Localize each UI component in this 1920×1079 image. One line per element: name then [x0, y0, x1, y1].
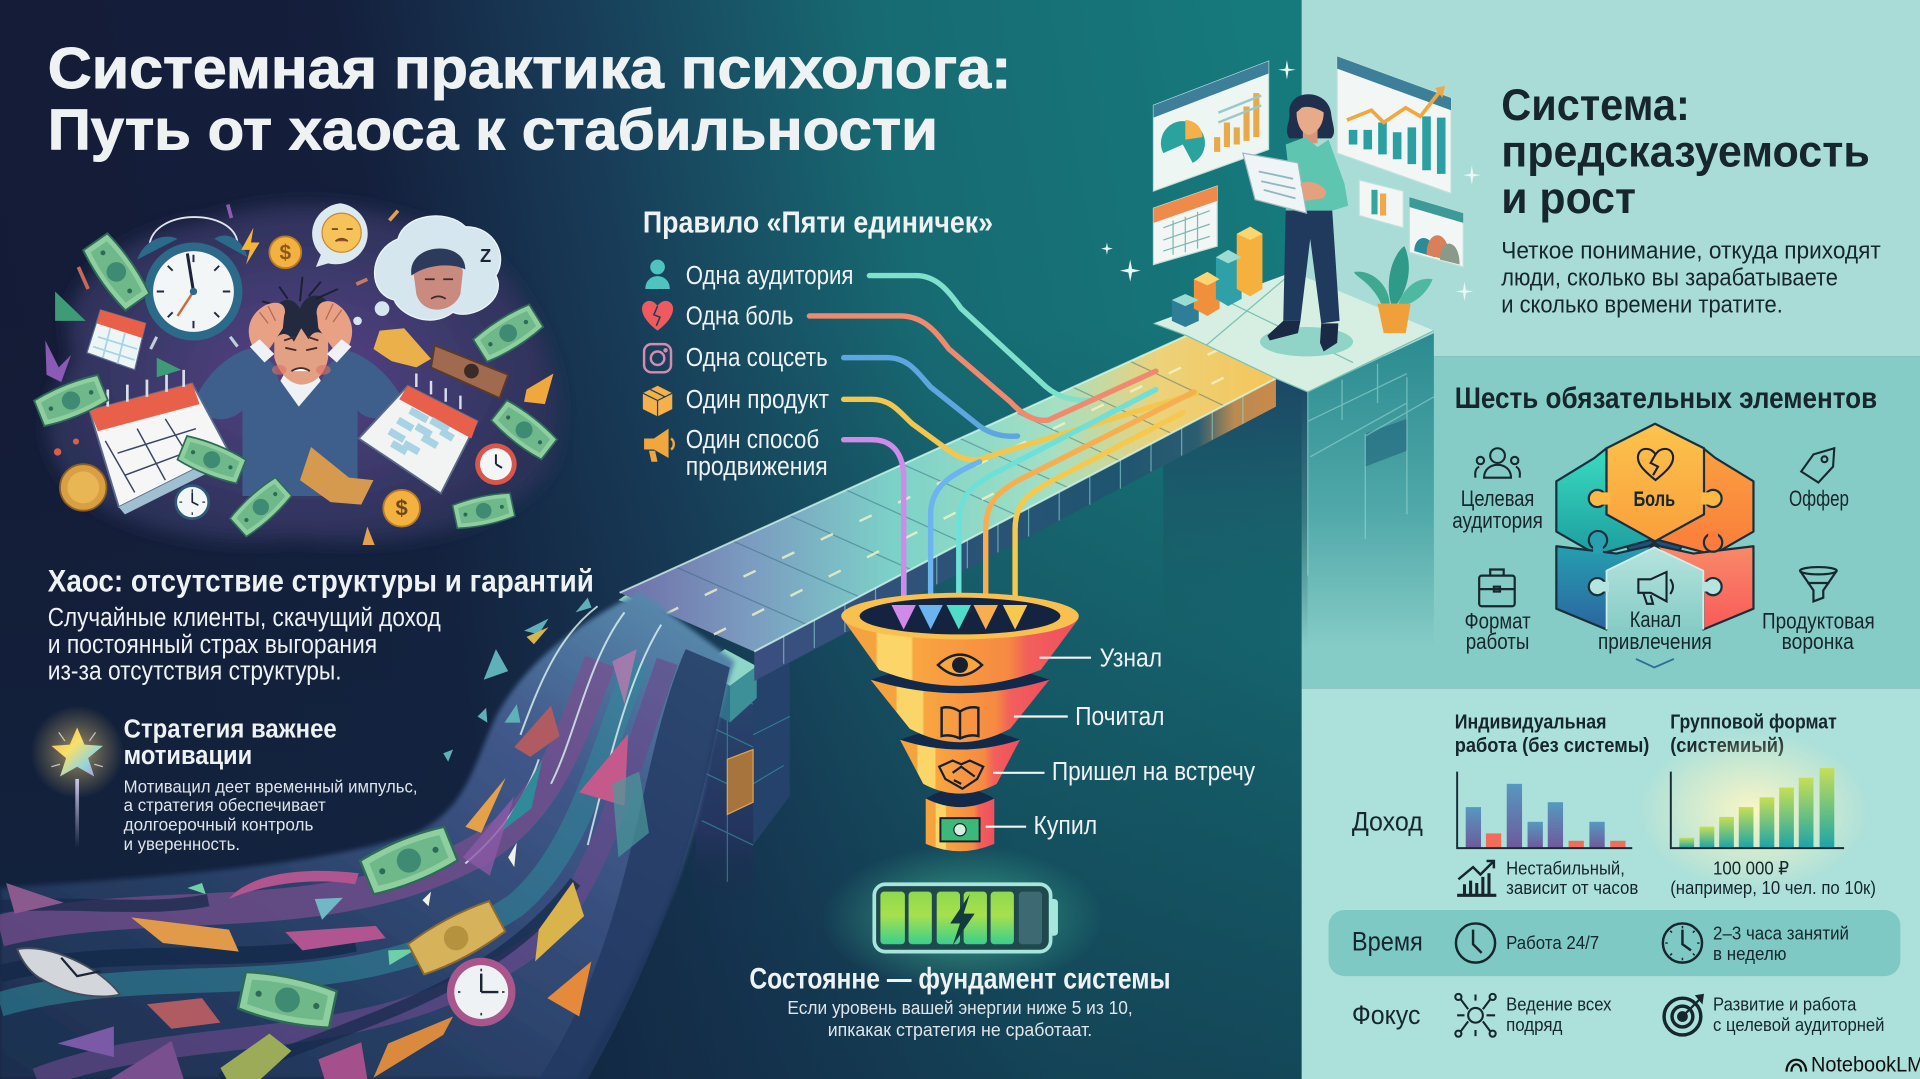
six element labels: [1452, 486, 1875, 654]
column headers: работа (без системы): [1455, 735, 1649, 757]
chaos illustration: [33, 203, 559, 545]
icon: chart with arrow: [1457, 861, 1496, 895]
funnel bands: [871, 680, 1049, 742]
system heading and text: [1501, 81, 1881, 318]
system heading and text: Четкое понимание, откуда приходят: [1501, 237, 1881, 264]
blob behind chaos scene: [48, 204, 559, 542]
stream: audience line: [869, 276, 1089, 400]
arrows: five streams into funnel: [809, 276, 1196, 612]
right dashboard: [1337, 56, 1451, 194]
funnel labels: Купил: [1033, 812, 1097, 840]
rule labels: [686, 262, 853, 481]
chaos heading and description: и постоянный страх выгорания: [48, 631, 377, 659]
rule labels: Одна аудитория: [686, 262, 853, 290]
six element labels: Канал: [1630, 607, 1681, 632]
icon: instagram: [644, 344, 671, 372]
rule labels: продвижения: [686, 453, 828, 481]
comparison cell texts: 2–3 часа занятий: [1713, 922, 1849, 943]
icon: clock detailed: [1663, 923, 1702, 963]
strategy text block: и уверенность.: [124, 834, 240, 854]
sparkles: [1101, 60, 1481, 301]
six element labels: Целевая: [1461, 486, 1534, 511]
chaos heading and description: Хаос: отсутствие структуры и гарантий: [48, 563, 594, 599]
strategy text block: [124, 715, 418, 854]
chaos heading and description: [48, 563, 594, 686]
isometric bars: [1172, 227, 1262, 327]
funnel labels: Пришел на встречу: [1052, 758, 1255, 786]
rule labels: Один способ: [686, 426, 819, 454]
comparison cell texts: Развитие и работа: [1713, 993, 1857, 1014]
platform top: [1153, 272, 1434, 392]
strategy text block: мотивации: [124, 742, 252, 770]
right column panels: [1302, 0, 1920, 1079]
icon: magic wand star: [31, 705, 124, 848]
thought cloud: Z: [480, 245, 491, 266]
system heading and text: и сколько времени тратите.: [1501, 291, 1783, 318]
icon: broken heart pain: [1638, 449, 1673, 480]
funnel labels: [1033, 644, 1255, 840]
energy foundation text: Состоянне — фундамент системы: [749, 962, 1171, 995]
stream: yellow arrow: [1015, 413, 1183, 612]
icon: funnel small: [1800, 567, 1837, 601]
rule labels: Один продукт: [686, 386, 829, 414]
comparison cell texts: с целевой аудиторней: [1713, 1014, 1884, 1035]
icon: clock simple: [1456, 923, 1495, 963]
chaos heading and description: из-за отсутствия структуры.: [48, 658, 342, 686]
chaos heading and description: Случайные клиенты, скачущий доход: [48, 604, 441, 632]
icon: energy battery: [822, 845, 1103, 992]
panel: six elements: [1452, 382, 1877, 667]
comparison cell texts: [1506, 857, 1884, 1035]
bolt and coin: $: [280, 242, 292, 265]
rule labels: Одна боль: [686, 303, 793, 331]
plant: [1354, 246, 1433, 333]
river debris shards: [6, 598, 649, 1079]
coins and small clocks: $: [396, 496, 408, 521]
calendar on wall: [1153, 186, 1217, 265]
system heading and text: предсказуемость: [1501, 128, 1870, 177]
bar chart: growing income: [1637, 731, 1870, 890]
flying bills: [33, 232, 559, 539]
heading: five ones: Правило «Пяти единичек»: [643, 206, 993, 240]
funnel labels: Почитал: [1075, 703, 1164, 731]
strategy text block: Стратегия важнее: [124, 715, 337, 743]
highlighted row: [1329, 910, 1900, 976]
funnel gaps: [871, 664, 1049, 807]
row labels: [1352, 806, 1423, 1030]
flowing chaos river: [0, 592, 735, 1079]
icon: eye: [938, 655, 982, 675]
coins and small clocks: [60, 443, 517, 527]
puzzle of hexagons: [1556, 424, 1753, 630]
right calendar: [359, 374, 478, 494]
icon: briefcase: [1479, 570, 1515, 606]
stream: purple arrow: [844, 440, 904, 612]
strategy text block: долгоерочный контроль: [124, 814, 313, 834]
icon: person: [645, 260, 670, 289]
funnel: [841, 593, 1255, 851]
panel: comparison table: [1329, 712, 1900, 1037]
energy foundation text: Если уровень вашей энергии ниже 5 из 10,: [787, 997, 1133, 1018]
isometric growth illustration: [1101, 56, 1481, 356]
funnel rim: [841, 593, 1079, 639]
row labels: Время: [1352, 926, 1423, 956]
left dashboard: [1153, 61, 1269, 191]
column headers: Групповой формат: [1670, 712, 1837, 734]
system heading and text: и рост: [1501, 174, 1636, 223]
background: [0, 0, 1303, 1079]
comparison cell texts: 100 000 ₽: [1713, 857, 1789, 878]
alarm clock: [137, 217, 247, 349]
comparison cell texts: Нестабильный,: [1506, 857, 1625, 878]
river money and clocks: [17, 823, 516, 1032]
strategy text block: а стратегия обеспечивает: [124, 795, 326, 815]
icon: target: [1664, 994, 1703, 1035]
six element labels: привлечения: [1598, 629, 1712, 654]
strategy text block: Мотивацил деет временный импульс,: [124, 776, 418, 796]
icon: banknote: [940, 818, 980, 841]
six element labels: Формат: [1464, 608, 1531, 633]
comparison cell texts: Ведение всех: [1506, 993, 1611, 1014]
icon: scattered network: [1455, 994, 1496, 1037]
column headers: Индивидуальная: [1455, 712, 1607, 734]
energy foundation text: [749, 962, 1171, 1040]
comparison cell texts: в неделю: [1713, 943, 1787, 964]
icon: audience: [1475, 448, 1520, 478]
stressed person: [196, 277, 402, 496]
comparison cell texts: подряд: [1506, 1014, 1563, 1035]
stream: pain line: [809, 316, 1156, 420]
comparison cell texts: Работа 24/7: [1506, 932, 1599, 953]
six element labels: Оффер: [1789, 486, 1849, 511]
title: Системная практика психолога:: [48, 37, 1011, 101]
bar chart: unstable income: [1457, 772, 1632, 848]
icon: tag: [1801, 448, 1834, 483]
bridge: [620, 336, 1276, 681]
icon: book: [942, 707, 978, 739]
six element labels: аудитория: [1452, 508, 1543, 533]
icon: chevron: [1636, 659, 1674, 667]
icon: megaphone channel: [1638, 572, 1673, 604]
six element labels: работы: [1466, 629, 1529, 654]
row labels: Фокус: [1352, 1000, 1420, 1030]
comparison cell texts: (например, 10 чел. по 10к): [1670, 877, 1876, 898]
arrowheads: [891, 605, 1027, 630]
row labels: Доход: [1352, 806, 1423, 836]
thought cloud: [353, 216, 501, 325]
funnel labels: Узнал: [1100, 644, 1162, 672]
panel: five ones rule: [642, 206, 993, 481]
system heading and text: люди, сколько вы зарабатываете: [1501, 264, 1838, 291]
icon: megaphone: [644, 429, 674, 462]
rule labels: Одна соцсеть: [686, 344, 828, 372]
stream: social line: [844, 358, 1018, 436]
system heading and text: Система:: [1501, 81, 1690, 130]
energy foundation text: ипкакак стратегия не сработаат.: [828, 1019, 1092, 1040]
pier of the chaos side: [618, 585, 790, 906]
six element labels: Боль: [1633, 488, 1675, 511]
six element labels: Продуктовая: [1762, 608, 1875, 633]
funnel leader lines: [986, 658, 1091, 827]
column headers: [1455, 712, 1837, 757]
comparison cell texts: зависит от часов: [1506, 877, 1638, 898]
speech bubble with face: [312, 203, 368, 267]
icon: box: [643, 386, 672, 416]
bolt and coin: [241, 228, 301, 268]
stream: product line: [844, 393, 1196, 460]
platform column: [1163, 333, 1434, 649]
column headers: (системиый): [1670, 735, 1784, 757]
paper scraps: [45, 205, 553, 545]
left calendar: [89, 370, 233, 514]
small cards: [1359, 180, 1463, 267]
stream: teal arrow: [959, 389, 1156, 612]
heading: six elements: Шесть обязательных элементов: [1455, 382, 1877, 415]
woman with document: [1243, 94, 1353, 356]
stream: blue arrow: [931, 462, 980, 612]
six element labels: воронка: [1782, 629, 1855, 654]
icon: handshake: [939, 761, 983, 789]
icon: broken heart: [642, 301, 673, 331]
small calendar: [87, 310, 146, 370]
stream: orange arrow: [986, 392, 1194, 612]
title: Путь от хаоса к стабильности: [48, 98, 938, 162]
title: [48, 37, 1011, 162]
